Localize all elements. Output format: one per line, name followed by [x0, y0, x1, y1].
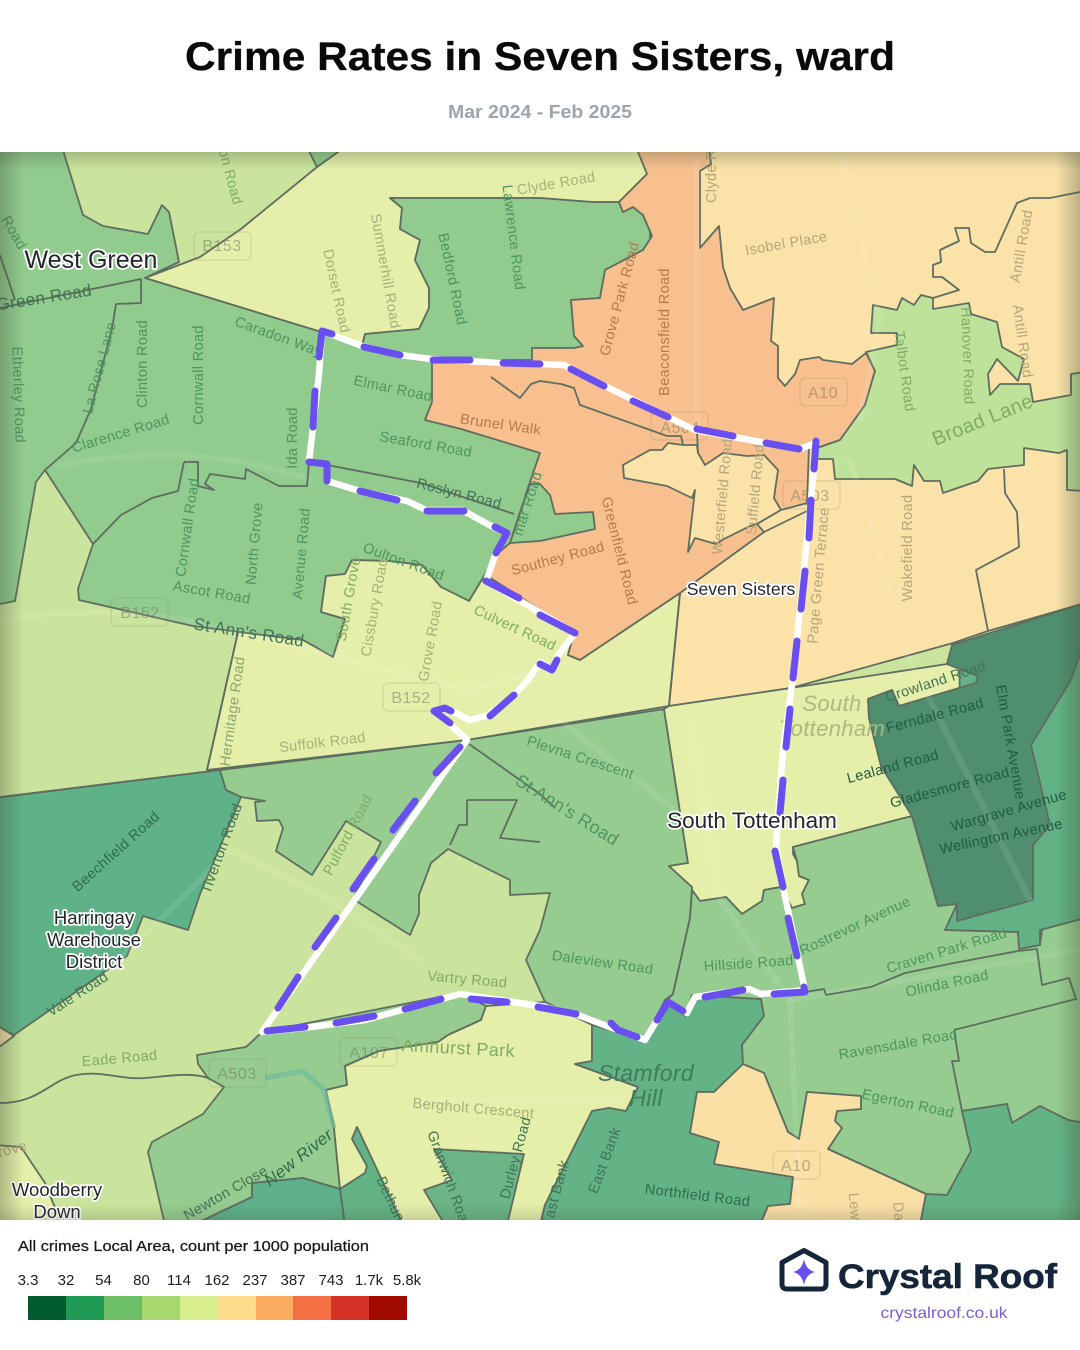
street name labels: Bedford Road	[434, 232, 469, 327]
street name labels: Cornwall Road	[191, 325, 207, 425]
street name labels: South	[802, 691, 862, 716]
street name labels: Olinda Road	[904, 967, 990, 1001]
street name labels: Wargrave Avenue	[949, 787, 1069, 835]
street name labels: Elm Park Avenue	[992, 684, 1028, 801]
street name labels: Suffield Road	[744, 443, 768, 536]
street name labels: Ravensdale Road	[838, 1027, 959, 1063]
road number badges: A10	[808, 385, 838, 402]
street name labels: Isobel Place	[744, 229, 829, 259]
street name labels: Hanover Road	[957, 307, 977, 405]
street name labels: Oulton Road	[361, 540, 446, 584]
street name labels: on Road	[215, 147, 245, 207]
legend scale labels: 162	[204, 1272, 230, 1289]
subtitle: date range: Mar 2024 - Feb 2025	[448, 102, 632, 122]
street name labels: Gladesmore Road	[889, 765, 1011, 812]
street name labels: Hillside Road	[703, 953, 794, 975]
place name labels: West Green	[25, 246, 157, 274]
street name labels: Broad Lane	[929, 390, 1036, 451]
street name labels: mar Road	[510, 470, 546, 538]
street name labels: Da	[889, 1201, 907, 1223]
street name labels: Hermitage Road	[217, 656, 249, 767]
website link: crystalroof.co.uk	[880, 1305, 1009, 1322]
road number badges: B153	[202, 238, 242, 255]
street name labels: Grove Park Road	[597, 240, 643, 358]
street name labels: Seaford Road	[378, 429, 473, 461]
street name labels: Plevna Crescent	[525, 733, 636, 783]
legend scale labels: 5.8k	[393, 1272, 422, 1289]
road number badges: A503	[217, 1066, 257, 1083]
street name labels: Etherley Road	[8, 346, 28, 443]
street name labels: Rostrevor Avenue	[797, 894, 913, 959]
legend scale labels: 387	[280, 1272, 306, 1289]
street name labels: Antill Road	[1008, 208, 1036, 284]
road number badges: A504	[660, 420, 700, 437]
street name labels: Suffolk Road	[278, 730, 367, 756]
legend scale labels: 114	[167, 1272, 191, 1289]
legend title: All crimes Local Area, count per 1000 population	[18, 1239, 369, 1255]
street name labels: Grove Road	[416, 600, 446, 683]
street name labels: Roslyn Road	[415, 476, 503, 512]
street name labels: Beaconsfield Road	[657, 268, 673, 396]
street name labels: New River	[261, 1124, 337, 1190]
street name labels: Clarence Road	[70, 412, 172, 457]
street name labels: Durley Road	[497, 1115, 535, 1201]
street name labels: Westerfield Road	[710, 438, 736, 555]
street name labels: Summerhill Road	[367, 213, 403, 330]
legend scale labels: 3.3	[18, 1272, 38, 1289]
place name labels: Down	[33, 1201, 81, 1222]
street name labels: Cissbury Road	[359, 557, 392, 658]
street name labels: Wellington Avenue	[938, 816, 1064, 858]
street name labels: Southey Road	[509, 539, 606, 579]
street name labels: South Grove	[334, 556, 364, 643]
street name labels: Wakefield Road	[900, 495, 916, 601]
street name labels: Clyde R	[704, 149, 720, 203]
place name labels: Harringay	[54, 907, 135, 928]
legend colour bar	[28, 1296, 407, 1320]
legend scale labels	[18, 1272, 422, 1289]
street name labels: Daleview Road	[551, 948, 654, 978]
street name labels: Ascot Road	[172, 578, 252, 608]
street name labels: Talbot Road	[890, 330, 918, 413]
street name labels: Page Green Terrace	[805, 507, 833, 644]
road number badges: A503	[790, 488, 830, 505]
street name labels: Vale Road	[44, 969, 111, 1020]
street name labels: Hill	[629, 1085, 663, 1111]
place name labels: South Tottenham	[667, 808, 837, 833]
street name labels: Lew	[845, 1192, 863, 1221]
place name labels: District	[66, 951, 122, 972]
street name labels: Elmar Road	[352, 373, 434, 405]
street name labels: Beechfield Road	[69, 809, 163, 895]
faint street network	[57, 158, 1070, 1140]
road number badges: B152	[120, 605, 160, 622]
street name labels: East Bank	[539, 1158, 573, 1229]
street name labels: St Ann's Road	[192, 614, 306, 651]
street name labels: Crowland Road	[884, 658, 988, 706]
logo wordmark: Crystal Roof	[838, 1258, 1058, 1296]
street name labels: East Bank	[586, 1125, 625, 1196]
street name labels: Eade Road	[81, 1048, 158, 1070]
street name labels: Ferndale Road	[884, 695, 986, 737]
street name labels: Clinton Road	[135, 320, 151, 408]
street name labels: Dorset Road	[319, 248, 353, 335]
place name labels: Seven Sisters	[687, 579, 795, 599]
street name labels: Ida Road	[285, 407, 301, 469]
street name labels: Northfield Road	[644, 1182, 751, 1210]
street name labels: Avenue Road	[290, 507, 314, 600]
legend scale labels: 80	[133, 1272, 150, 1289]
street name labels: St Ann's Road	[512, 770, 623, 850]
legend scale labels: 32	[58, 1272, 74, 1289]
title: Crime Rates in Seven Sisters, ward	[185, 35, 895, 79]
street name labels: Granwich Road	[423, 1129, 474, 1232]
street name labels: North Grove	[243, 502, 267, 586]
street name labels: Bethune	[372, 1174, 411, 1232]
road number badges: A10	[781, 1158, 811, 1175]
road number badges	[111, 232, 847, 1179]
street name labels: Greenfield Road	[598, 495, 640, 607]
street name labels: Stamford	[598, 1060, 695, 1086]
street name labels: Craven Park Road	[885, 925, 1009, 977]
street name labels: Caradon Way	[232, 314, 325, 361]
place name labels	[12, 246, 837, 1222]
street name labels: Newton Close	[181, 1163, 271, 1224]
street name labels: La Rose Lane	[80, 320, 120, 416]
map areas: crime rate polygons	[0, 147, 1080, 1225]
legend scale labels: 54	[95, 1272, 112, 1289]
street name labels: Culvert Road	[471, 602, 558, 654]
street name labels	[0, 147, 1069, 1232]
street name labels: Brunel Walk	[459, 411, 542, 439]
street name labels: Antill Road	[1009, 304, 1035, 379]
road number badges: A107	[349, 1045, 389, 1062]
legend scale labels: 1.7k	[355, 1272, 384, 1289]
street name labels: Tottenham	[779, 716, 885, 741]
water: New River	[265, 1071, 334, 1128]
logo: house icon with star	[782, 1250, 826, 1289]
street name labels: Vartry Road	[427, 969, 508, 991]
road number badges: B152	[391, 690, 431, 707]
street name labels: Pulford Road	[321, 792, 376, 878]
legend scale labels: 237	[242, 1272, 268, 1289]
ward boundary: purple dashes	[267, 331, 816, 1037]
street name labels: Tiverton Road	[198, 801, 246, 896]
street name labels: Egerton Road	[860, 1087, 955, 1122]
street name labels: Lealand Road	[845, 747, 941, 787]
street name labels: Amhurst Park	[401, 1035, 516, 1061]
interior ward boundaries	[0, 191, 1080, 1111]
ward boundary: white base line	[262, 331, 816, 1040]
street name labels: Lawrence Road	[499, 184, 527, 291]
legend scale labels: 743	[318, 1272, 344, 1289]
place name labels: Woodberry	[12, 1179, 103, 1200]
street name labels: Clyde Road	[516, 169, 597, 199]
place name labels: Warehouse	[47, 929, 141, 950]
street name labels: Cornwall Road	[173, 477, 203, 578]
street name labels: Bergholt Crescent	[412, 1096, 535, 1122]
